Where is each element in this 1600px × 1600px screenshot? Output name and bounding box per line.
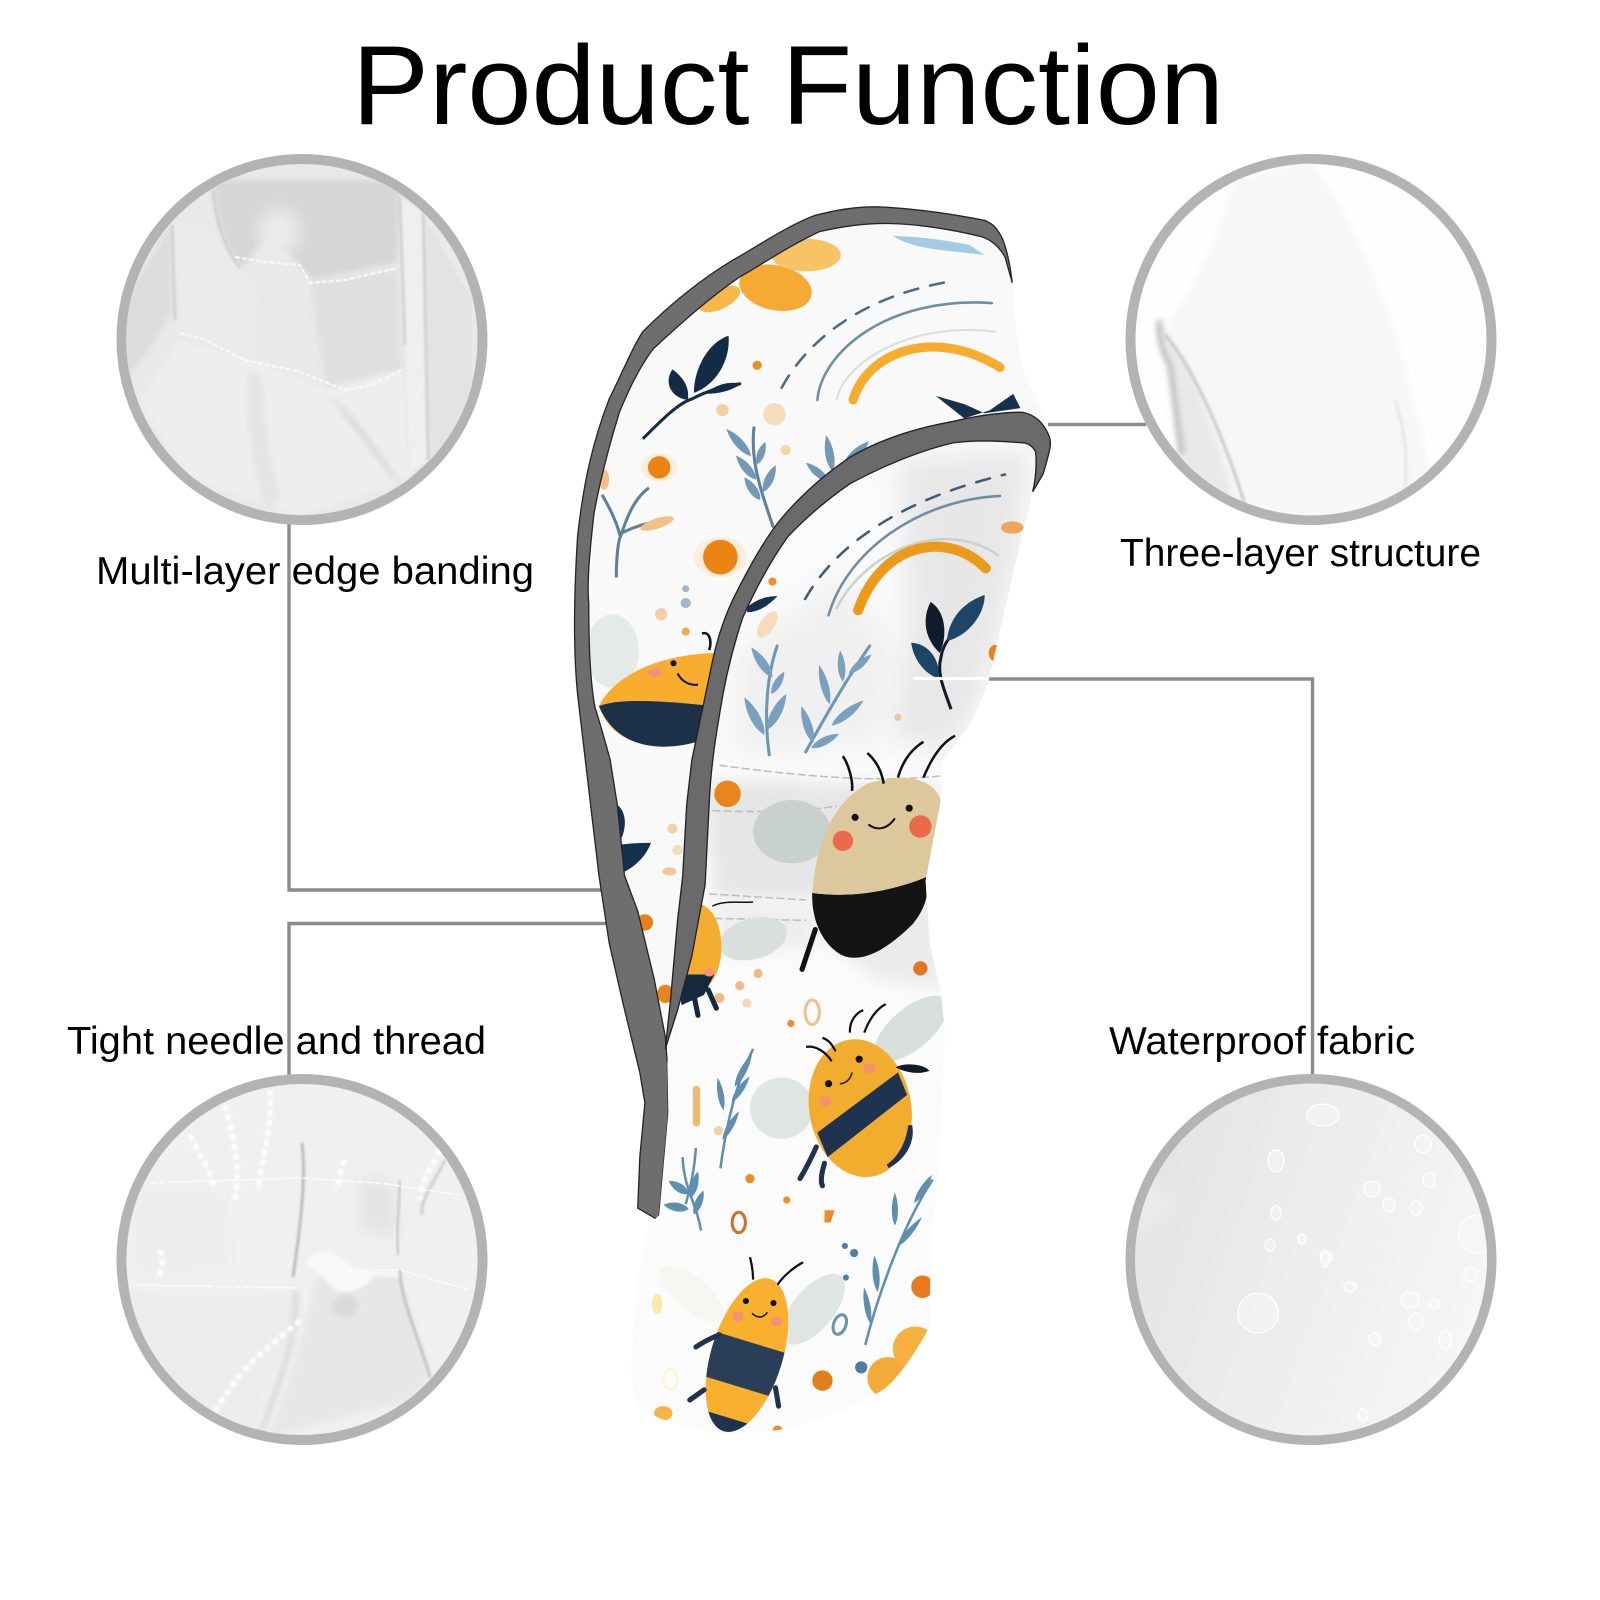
bee: middle yellow bee (750, 996, 944, 1188)
back pattern: navy sprig (643, 336, 742, 439)
leader line: waterproof fabric (988, 679, 1312, 1075)
stitching lines (709, 764, 940, 922)
title: Product Function (352, 23, 1224, 148)
label: multi-layer edge banding: Multi-layer edge banding (96, 550, 534, 593)
back panel edge band (574, 207, 1012, 1219)
front pattern: lower sprigs (663, 1049, 934, 1345)
circle: waterproof fabric detail (1130, 1079, 1495, 1440)
bee: large tan bee (753, 736, 955, 969)
label: tight needle and thread: Tight needle and thread (67, 1020, 486, 1063)
fabric shading (704, 449, 1031, 990)
back pattern: navy leaves above front band (936, 394, 1020, 418)
front pattern: dots (652, 578, 928, 1436)
back pattern: blue sprigs (723, 426, 872, 528)
front pattern: blue sprigs (740, 645, 874, 756)
back pattern: rainbow (782, 283, 1000, 400)
product: golf headcover (561, 194, 1071, 1453)
leader line: multi-layer edge banding (289, 524, 630, 890)
bee: bottom yellow bee (660, 1256, 845, 1432)
circle: three-layer structure detail (1130, 159, 1492, 530)
bee: small side bee (674, 902, 792, 1015)
circle: multi-layer edge banding detail (122, 159, 482, 520)
front panel fabric with pattern (652, 442, 1036, 1432)
back pattern: orange flowers and stem (599, 453, 747, 578)
leader line: three-layer structure (1048, 423, 1146, 426)
label: waterproof fabric: Waterproof fabric (1109, 1020, 1415, 1063)
label: three-layer structure: Three-layer structure (1120, 532, 1481, 575)
back pattern: bee (586, 614, 719, 747)
back panel fabric with pattern (590, 236, 1020, 1003)
front pattern: navy sprig (911, 595, 1001, 709)
front pattern: lower flowers (812, 1276, 938, 1398)
front panel edge band (665, 412, 1050, 1049)
front pattern: rainbow (805, 474, 1023, 615)
leader overlay: white pointer line on fabric (913, 677, 988, 680)
leader line: tight needle and thread (289, 924, 710, 1075)
circle: tight needle and thread detail (122, 1079, 482, 1440)
front pattern: rings (732, 1000, 849, 1336)
back pattern: flower petals (695, 236, 985, 318)
back pattern: dots (637, 361, 791, 1003)
cattail (693, 1086, 700, 1127)
back pattern: navy leaf (616, 804, 651, 872)
